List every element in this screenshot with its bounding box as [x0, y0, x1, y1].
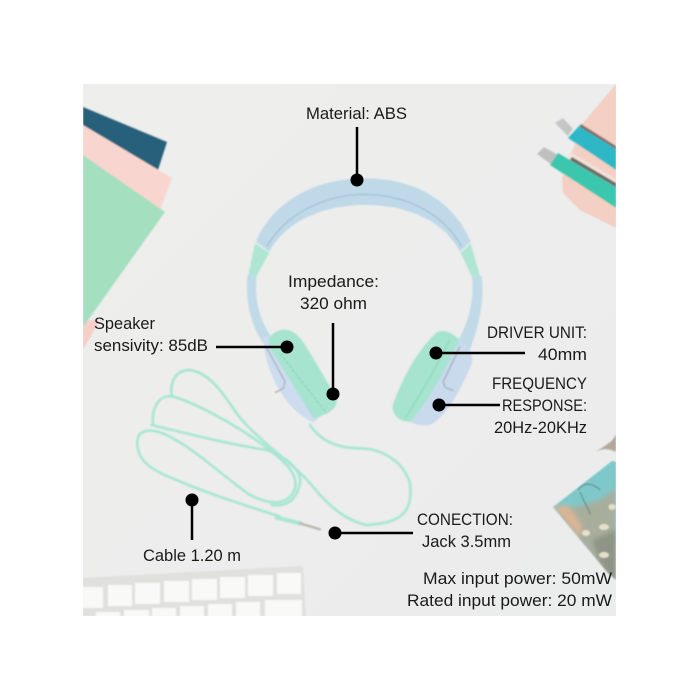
- label: input power: [407, 569, 612, 610]
- label: driver unit: DRIVER UNIT:: [487, 323, 587, 342]
- label: frequency response: FREQUENCY: [492, 374, 587, 393]
- label: input power: Rated input power: 20 mW: [407, 591, 612, 610]
- label: driver unit: [430, 323, 587, 364]
- keyboard: [83, 566, 306, 618]
- label: impedance: [288, 272, 379, 400]
- label: impedance: 320 ohm: [300, 294, 367, 313]
- label: frequency response: [432, 374, 587, 437]
- label: speaker sensitivity: Speaker: [94, 314, 155, 333]
- label: cable length: [143, 494, 241, 565]
- label: frequency response: 20Hz-20KHz: [494, 418, 587, 437]
- label: driver unit: 40mm: [538, 345, 587, 364]
- label: speaker sensitivity: [94, 314, 294, 355]
- label: impedance: Impedance:: [288, 272, 379, 291]
- left shell: [264, 337, 318, 422]
- cable: [137, 370, 411, 529]
- right cushion: [392, 331, 459, 422]
- right shell: [407, 338, 472, 425]
- stems: [246, 274, 271, 343]
- label: connection: [328, 510, 513, 551]
- headphones: [247, 178, 483, 425]
- photo background: [83, 84, 616, 616]
- left cushion: [269, 330, 337, 418]
- label: connection: CONECTION:: [417, 510, 513, 529]
- label: material: [306, 104, 407, 186]
- label: connection: Jack 3.5mm: [422, 532, 511, 551]
- photo print and plant: [553, 434, 616, 585]
- notebooks: [83, 107, 172, 350]
- label: input power: Max input power: 50mW: [423, 569, 612, 588]
- label: material: Material: ABS: [306, 104, 407, 123]
- label: cable length: Cable 1.20 m: [143, 546, 241, 565]
- label: frequency response: RESPONSE:: [502, 396, 587, 415]
- pens and pink box: [537, 84, 616, 228]
- headband: [256, 178, 471, 252]
- label: speaker sensitivity: sensivity: 85dB: [94, 336, 208, 355]
- band sliders: [248, 243, 269, 276]
- photo objects: [83, 84, 616, 618]
